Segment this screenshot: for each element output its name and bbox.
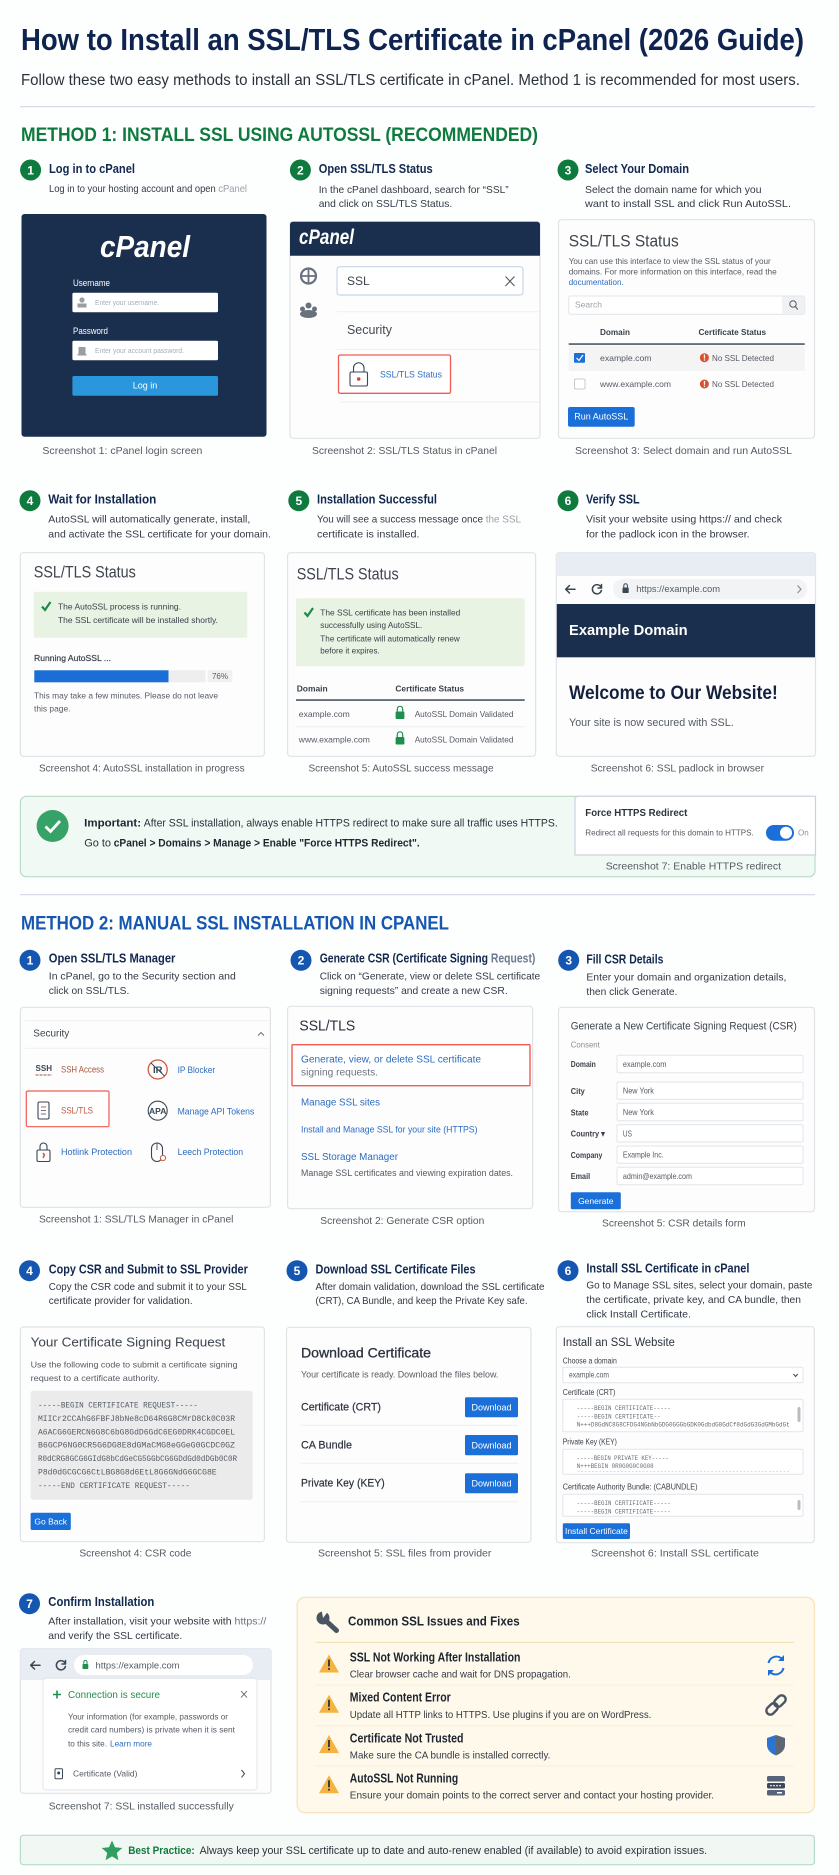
screenshot 5: download: Download [471,1402,512,1412]
step 6: verify [558,490,783,540]
step 5: success: You will see a success message once the SSL [317,514,521,526]
screenshot 4: progress: Running AutoSSL ... [34,653,111,663]
screenshot 2: SSL/TLS menu: SSL Storage Manager [301,1152,399,1163]
step 4: wait: Wait for Installation [48,491,156,506]
screenshot 3: status table: Certificate Status [698,327,766,337]
issue: not trusted: Make sure the CA bundle is installed correctly. [350,1749,550,1761]
screenshot 6: install form: Install Certificate [565,1526,628,1536]
screenshot 3: CSR form: Generate a New Certificate Signing Request (CSR) [571,1020,797,1032]
screenshot 5: success message: AutoSSL Domain Validated [415,734,514,744]
step 1: open manager: In cPanel, go to the Security section and [49,970,236,982]
screenshot 3: status table: documentation. [569,277,624,287]
step 1: log in: Log in to cPanel [49,161,135,176]
screenshot 5: success message: Domain [297,684,328,694]
screenshot 1: security section: Manage API Tokens [178,1106,255,1116]
step 7: confirm [19,1593,266,1642]
screenshot 6: browser: https://example.com [636,584,720,595]
step 7: confirm: Confirm Installation [48,1594,154,1609]
screenshot 7: connection secure: Certificate (Valid) [73,1768,138,1778]
icon: green check [37,810,69,842]
screenshot 5: download: Your certificate is ready. Download the files below. [301,1370,498,1380]
step 5: download files: Download SSL Certificate Files [316,1261,476,1276]
heading: method 1: METHOD 1: INSTALL SSL USING AUTOSSL (RECOMMENDED) [21,125,538,146]
screenshot 6: install form: Private Key (KEY) [563,1437,617,1446]
screenshot 2: search: Security [347,322,392,337]
screenshot 3: status table [558,220,814,438]
step 3: select domain: Select the domain name for which you [585,184,762,196]
step 7: confirm: After installation, visit your website with https:// [48,1615,266,1627]
step 4: wait: 4 [27,494,34,508]
step 4: wait [20,490,271,540]
step 5: download files: After domain validation, download the SSL certificate [316,1281,545,1293]
step 5: download files: (CRT), CA Bundle, and keep the Private Key safe. [316,1295,528,1307]
step 1: open manager [20,950,236,997]
step 4: copy CSR: 4 [26,1264,33,1278]
screenshot 6: install form [556,1327,814,1543]
screenshot 3: status table: www.example.com [599,379,671,389]
step 3: fill CSR: 3 [565,954,572,968]
issue: not trusted [319,1730,785,1761]
screenshot 3: CSR form [558,1007,814,1212]
issue: not working: Clear browser cache and wait for DNS propagation. [350,1669,571,1681]
step 5: success [288,490,521,540]
step 5: download files [286,1260,545,1307]
panel: common SSL issues: Common SSL Issues and Fixes [348,1614,520,1629]
screenshot 2: SSL/TLS menu: Manage SSL sites [301,1098,380,1109]
screenshot 1: security section: SSH Access [61,1064,104,1074]
step 1: open manager: 1 [27,954,34,968]
callout: best practice [20,1835,814,1865]
caption 5: Screenshot 5: AutoSSL success message [308,763,494,775]
caption m2-4: Screenshot 4: CSR code [79,1548,192,1560]
step 6: install cert: the certificate, private key, and CA bundle, then [586,1294,801,1306]
caption m2-3: Screenshot 5: CSR details form [602,1218,746,1230]
screenshot 3: status table: SSL/TLS Status [569,232,679,251]
screenshot 5: success message: The certificate will automatically renew [320,634,461,644]
screenshot 6: install form: ----------------------------------------------------------- [577,1468,790,1475]
screenshot 3: CSR form: Country ▾ [571,1128,605,1138]
icon: wrench [316,1610,336,1630]
screenshot 2: SSL/TLS menu: Manage SSL certificates and viewing expiration dates. [301,1168,513,1178]
screenshot 3: status table: You can use this interface to view the SSL status of your [569,256,771,266]
step 3: fill CSR [558,950,786,998]
issue: autossl not running [319,1771,785,1802]
screenshot 1: security section: APA [149,1106,166,1116]
screenshot 6: install form: N+++D8GdNC8G8CFDG4NGbNbGDG0GGGbGDK0GdbdG8GdCf8dGdG3GdGMbGdGt [577,1422,790,1429]
screenshot 2: SSL/TLS menu [288,1006,533,1209]
step 3: fill CSR: then click Generate. [586,986,677,998]
screenshot 1: security section: Hotlink Protection [61,1147,132,1157]
screenshot 4: progress: The AutoSSL process is running. [58,601,181,611]
screenshot 5: success message: www.example.com [298,734,370,744]
screenshot 1: security section [20,1007,270,1207]
screenshot 3: CSR form: admin@example.com [623,1171,692,1181]
issue: not working [319,1650,784,1681]
step 7: confirm: and verify the SSL certificate. [48,1630,182,1642]
caption m2-5: Screenshot 5: SSL files from provider [318,1548,492,1560]
caption m2-1: Screenshot 1: SSL/TLS Manager in cPanel [39,1214,233,1226]
screenshot 3: status table: No SSL Detected [712,379,774,389]
screenshot 7: connection secure [20,1649,271,1793]
step 1: open manager: Open SSL/TLS Manager [49,950,175,965]
screenshot 6: install form: Choose a domain [563,1357,617,1366]
step 4: wait: AutoSSL will automatically generate, install, [48,514,250,526]
screenshot 6: install form: Install an SSL Website [563,1337,675,1349]
callout: best practice: Best Practice: [128,1845,195,1857]
issue: autossl not running: Ensure your domain points to the correct server and contact your hosting provider. [350,1790,714,1802]
step 1: log in: 1 [27,164,34,178]
screenshot 3: CSR form: Company [571,1150,603,1160]
issue: mixed content: Update all HTTP links to HTTPS. Use plugins if you are on WordPress. [350,1709,651,1721]
screenshot 3: CSR form: US [623,1128,632,1138]
screenshot 4: CSR code: -----END CERTIFICATE REQUEST----- [38,1481,190,1491]
issue: not working: SSL Not Working After Installation [350,1650,520,1665]
panel: common SSL issues [297,1597,814,1813]
screenshot 1: cPanel login: Enter your username. [95,298,159,307]
screenshot 4: CSR code: -----BEGIN CERTIFICATE REQUEST----- [38,1401,198,1411]
screenshot 6: install form: example.com [569,1370,609,1380]
screenshot 3: CSR form: New York [623,1086,655,1096]
screenshot 3: status table: No SSL Detected [712,353,774,363]
step 1: log in [20,160,247,195]
screenshot 3: CSR form: Email [571,1171,590,1181]
screenshot 4: CSR code: R0dCRG8GCG6GIdG8bCdGeCG5GGbCG6GDdGd0dDGb0C0R [38,1454,237,1464]
screenshot 2: SSL/TLS menu: Generate, view, or delete SSL certificate [301,1054,481,1065]
screenshot 5: success message: before it expires. [320,645,380,655]
screenshot 4: CSR code: Use the following code to submit a certificate signing [31,1359,238,1369]
screenshot 2: search [290,222,540,438]
step 6: install cert: Go to Manage SSL sites, select your domain, paste [586,1280,813,1292]
callout: important HTTPS redirect: Important: [84,818,141,830]
step 3: fill CSR: Enter your domain and organization details, [586,972,786,984]
screenshot 5: success message: example.com [299,709,350,719]
screenshot 7: force redirect: On [798,829,809,838]
subtitle: Follow these two easy methods to install an SSL/TLS certificate in cPanel. Method 1 is recommended for most users. [21,72,800,89]
step 4: wait: and activate the SSL certificate for your domain. [48,528,271,540]
callout: important HTTPS redirect: After SSL installation, always enable HTTPS redirect to make sure all traffic uses HTTPS. [144,818,558,830]
caption 1: Screenshot 1: cPanel login screen [42,445,203,457]
screenshot 6: install form: -----BEGIN CERTIFICATE----- [577,1508,671,1515]
screenshot 3: status table: Domain [600,327,630,337]
caption m2-6: Screenshot 6: Install SSL certificate [591,1548,759,1560]
caption m2-7: Screenshot 7: SSL installed successfully [49,1800,235,1812]
screenshot 4: progress: This may take a few minutes. Please do not leave [34,691,218,701]
issue: mixed content [319,1690,787,1721]
step 5: download files: 5 [294,1264,301,1278]
step 6: install cert: click Install Certificate. [586,1308,691,1320]
step 3: select domain [558,160,791,210]
screenshot 4: CSR code: MIICr2CCAhG6FBFJ8bNe8cD64R6G8CMrD8Ck0C03R [38,1414,235,1424]
screenshot 7: connection secure: to this site. [68,1738,107,1748]
screenshot 7: force redirect: Force HTTPS Redirect [585,808,688,819]
screenshot 3: CSR form: Domain [571,1059,596,1069]
screenshot 5: download: CA Bundle [301,1439,352,1451]
step 4: copy CSR [19,1260,248,1307]
screenshot 4: CSR code: P8d0dGCGCG6CtLBG8G8d6EtL8G6GNdG6GCG8E [38,1467,217,1477]
heading: method 2: METHOD 2: MANUAL SSL INSTALLATION IN CPANEL [21,913,449,934]
step 4: copy CSR: Copy the CSR code and submit it to your SSL [49,1281,247,1293]
step 6: install cert: Install SSL Certificate in cPanel [586,1260,749,1275]
screenshot 7: force redirect: Redirect all requests for this domain to HTTPS. [585,829,754,838]
screenshot 3: CSR form: City [571,1086,585,1096]
screenshot 1: cPanel login: Enter your account password. [95,346,184,355]
step 5: success: 5 [295,494,302,508]
screenshot 2: search: SSL/TLS Status [380,370,442,381]
screenshot 4: CSR code [20,1327,264,1542]
step 4: copy CSR: Copy CSR and Submit to SSL Provider [49,1261,248,1276]
screenshot 1: cPanel login [22,214,266,437]
step 2: generate CSR: Generate CSR (Certificate Signing Request) [320,950,535,965]
screenshot 6: install form: -----BEGIN CERTIFICATE-- [577,1413,661,1420]
callout: important HTTPS redirect: Go to [84,838,111,850]
screenshot 6: install form: Certificate Authority Bundle: (CABUNDLE) [563,1482,698,1491]
screenshot 5: success message: SSL/TLS Status [297,564,399,583]
screenshot 6: browser [556,553,816,756]
screenshot 1: security section: IR [153,1065,163,1076]
screenshot 7: connection secure: Your information (for example, passwords or [68,1711,228,1721]
screenshot 7: connection secure: credit card numbers) is private when it is sent [68,1725,236,1735]
step 3: select domain: 3 [565,164,572,178]
caption 6: Screenshot 6: SSL padlock in browser [591,763,764,775]
screenshot 6: browser: Example Domain [569,622,688,639]
screenshot 3: status table: Search [575,300,602,310]
step 2: generate CSR: signing requests” and create a new CSR. [320,985,508,997]
screenshot 2: SSL/TLS menu: signing requests. [301,1068,378,1079]
step 3: select domain: want to install SSL and click Run AutoSSL. [584,198,791,210]
screenshot 3: CSR form: example.com [623,1059,666,1069]
callout: best practice: Always keep your SSL certificate up to date and auto-renew enabled (if available) to avoid expiration issues. [200,1845,707,1857]
screenshot 4: progress: 76% [212,672,228,681]
step 2: generate CSR: 2 [298,954,305,968]
screenshot 6: install form: -----BEGIN CERTIFICATE----- [577,1500,671,1507]
screenshot 6: install form: -----BEGIN PRIVATE KEY----- [577,1455,669,1462]
step 2: open status [290,160,509,210]
issue: mixed content: Mixed Content Error [350,1690,451,1705]
screenshot 5: success message: Certificate Status [395,684,464,694]
step 7: confirm: 7 [26,1597,33,1611]
step 1: open manager: click on SSL/TLS. [49,985,129,997]
step 2: open status: and click on SSL/TLS Status. [319,198,452,210]
screenshot 3: CSR form: State [571,1108,589,1118]
screenshot 4: CSR code: B6GCP6NG0CR5G6DG8E8dGMaCMG8eGGeG0GCDC0GZ [38,1441,235,1451]
screenshot 4: CSR code: Your Certificate Signing Request [31,1335,226,1350]
screenshot 6: browser: Your site is now secured with SSL. [569,717,734,729]
screenshot 3: CSR form: Generate [578,1196,614,1206]
caption 2: Screenshot 2: SSL/TLS Status in cPanel [312,445,497,457]
screenshot 2: search: SSL [347,274,370,288]
screenshot 5: success message: AutoSSL Domain Validated [415,709,514,719]
screenshot 5: success message: successfully using AutoSSL. [320,620,422,630]
step 2: open status: 2 [297,164,304,178]
screenshot 4: CSR code: A6ACG6GERCN6G8C6bG8GdD6GdC6EG0DRK4CGDC0EL [38,1427,235,1437]
screenshot 6: install form: Certificate (CRT) [563,1388,616,1397]
screenshot 3: CSR form: Consent [571,1040,600,1050]
screenshot 2: SSL/TLS menu: Install and Manage SSL for your site (HTTPS) [301,1125,478,1136]
screenshot 5: download: Download Certificate [301,1344,431,1360]
step 3: fill CSR: Fill CSR Details [586,951,663,966]
screenshot 7: connection secure: https://example.com [96,1661,180,1672]
screenshot 5: download: Download [471,1440,512,1450]
screenshot 1: cPanel login: cPanel [100,229,191,264]
screenshot 4: progress: SSL/TLS Status [34,562,136,581]
screenshot 5: download: Certificate (CRT) [301,1401,381,1413]
screenshot 1: cPanel login: Log in [133,381,157,391]
step 6: install cert: 6 [565,1264,572,1278]
screenshot 5: download: Private Key (KEY) [301,1478,385,1490]
screenshot 7: connection secure: Learn more [110,1738,152,1748]
screenshot 6: browser: Welcome to Our Website! [569,683,778,704]
screenshot 4: progress: this page. [34,704,70,714]
screenshot 3: status table: domains. For more information on this interface, read the [569,267,777,277]
step 3: select domain: Select Your Domain [585,161,689,176]
screenshot 1: security section: Security [33,1028,70,1040]
screenshot 4: progress: The SSL certificate will be installed shortly. [58,615,218,625]
screenshot 1: security section: SSH [36,1063,52,1073]
step 1: log in: Log in to your hosting account and open cPanel [49,183,247,195]
callout: important HTTPS redirect [20,796,815,877]
step 5: success: Installation Successful [317,491,437,506]
screenshot 6: install form: N+++BEGIN 0R0G0G0C0G08 [577,1463,654,1470]
screenshot 1: security section: SSL/TLS [61,1105,93,1115]
issue: autossl not running: AutoSSL Not Running [350,1771,458,1786]
screenshot 5: success message [288,553,536,756]
screenshot 2: search: cPanel [299,226,355,249]
screenshot 3: CSR form: Example Inc. [623,1150,664,1160]
step 4: copy CSR: certificate provider for validation. [49,1295,193,1307]
screenshot 5: success message: The SSL certificate has been installed [320,608,461,618]
step 5: success: certificate is installed. [317,528,420,540]
issue: not trusted: Certificate Not Trusted [350,1730,464,1745]
callout: important HTTPS redirect: cPanel > Domains > Manage > Enable "Force HTTPS Redirect". [114,838,420,850]
screenshot 7: force redirect [575,796,816,855]
caption 3: Screenshot 3: Select domain and run AutoSSL [575,445,792,457]
step 6: verify: Visit your website using https:// and check [586,514,783,526]
screenshot 7: connection secure: Connection is secure [68,1689,160,1701]
step 6: verify: Verify SSL [586,491,640,506]
screenshot 5: download [286,1327,531,1542]
screenshot 3: status table: Run AutoSSL [574,411,628,421]
step 6: verify: for the padlock icon in the browser. [586,528,750,540]
step 6: verify: 6 [565,494,572,508]
screenshot 3: status table: example.com [600,353,652,363]
screenshot 6: install form: -----BEGIN CERTIFICATE----- [577,1405,671,1412]
screenshot 1: security section: IP Blocker [178,1065,215,1075]
screenshot 4: CSR code: Go Back [34,1516,68,1526]
screenshot 5: download: Download [471,1478,512,1488]
caption 4: Screenshot 4: AutoSSL installation in progress [39,763,245,775]
step 2: open status: Open SSL/TLS Status [319,161,433,176]
step 2: generate CSR: Click on “Generate, view or delete SSL certificate [320,970,540,982]
screenshot 4: progress [20,553,264,756]
step 2: open status: In the cPanel dashboard, search for “SSL” [319,184,509,196]
caption m2-2: Screenshot 2: Generate CSR option [320,1215,484,1227]
screenshot 1: security section: Leech Protection [178,1147,243,1157]
screenshot 1: cPanel login: Username [73,278,110,289]
screenshot 4: CSR code: request to a certificate authority. [31,1373,160,1383]
step 2: generate CSR [290,950,540,997]
screenshot 3: CSR form: New York [623,1107,655,1117]
screenshot 1: cPanel login: Password [73,326,108,337]
callout: important HTTPS redirect: Screenshot 7: Enable HTTPS redirect [606,860,781,872]
step 6: install cert [558,1260,813,1320]
screenshot 2: SSL/TLS menu: SSL/TLS [299,1018,355,1035]
